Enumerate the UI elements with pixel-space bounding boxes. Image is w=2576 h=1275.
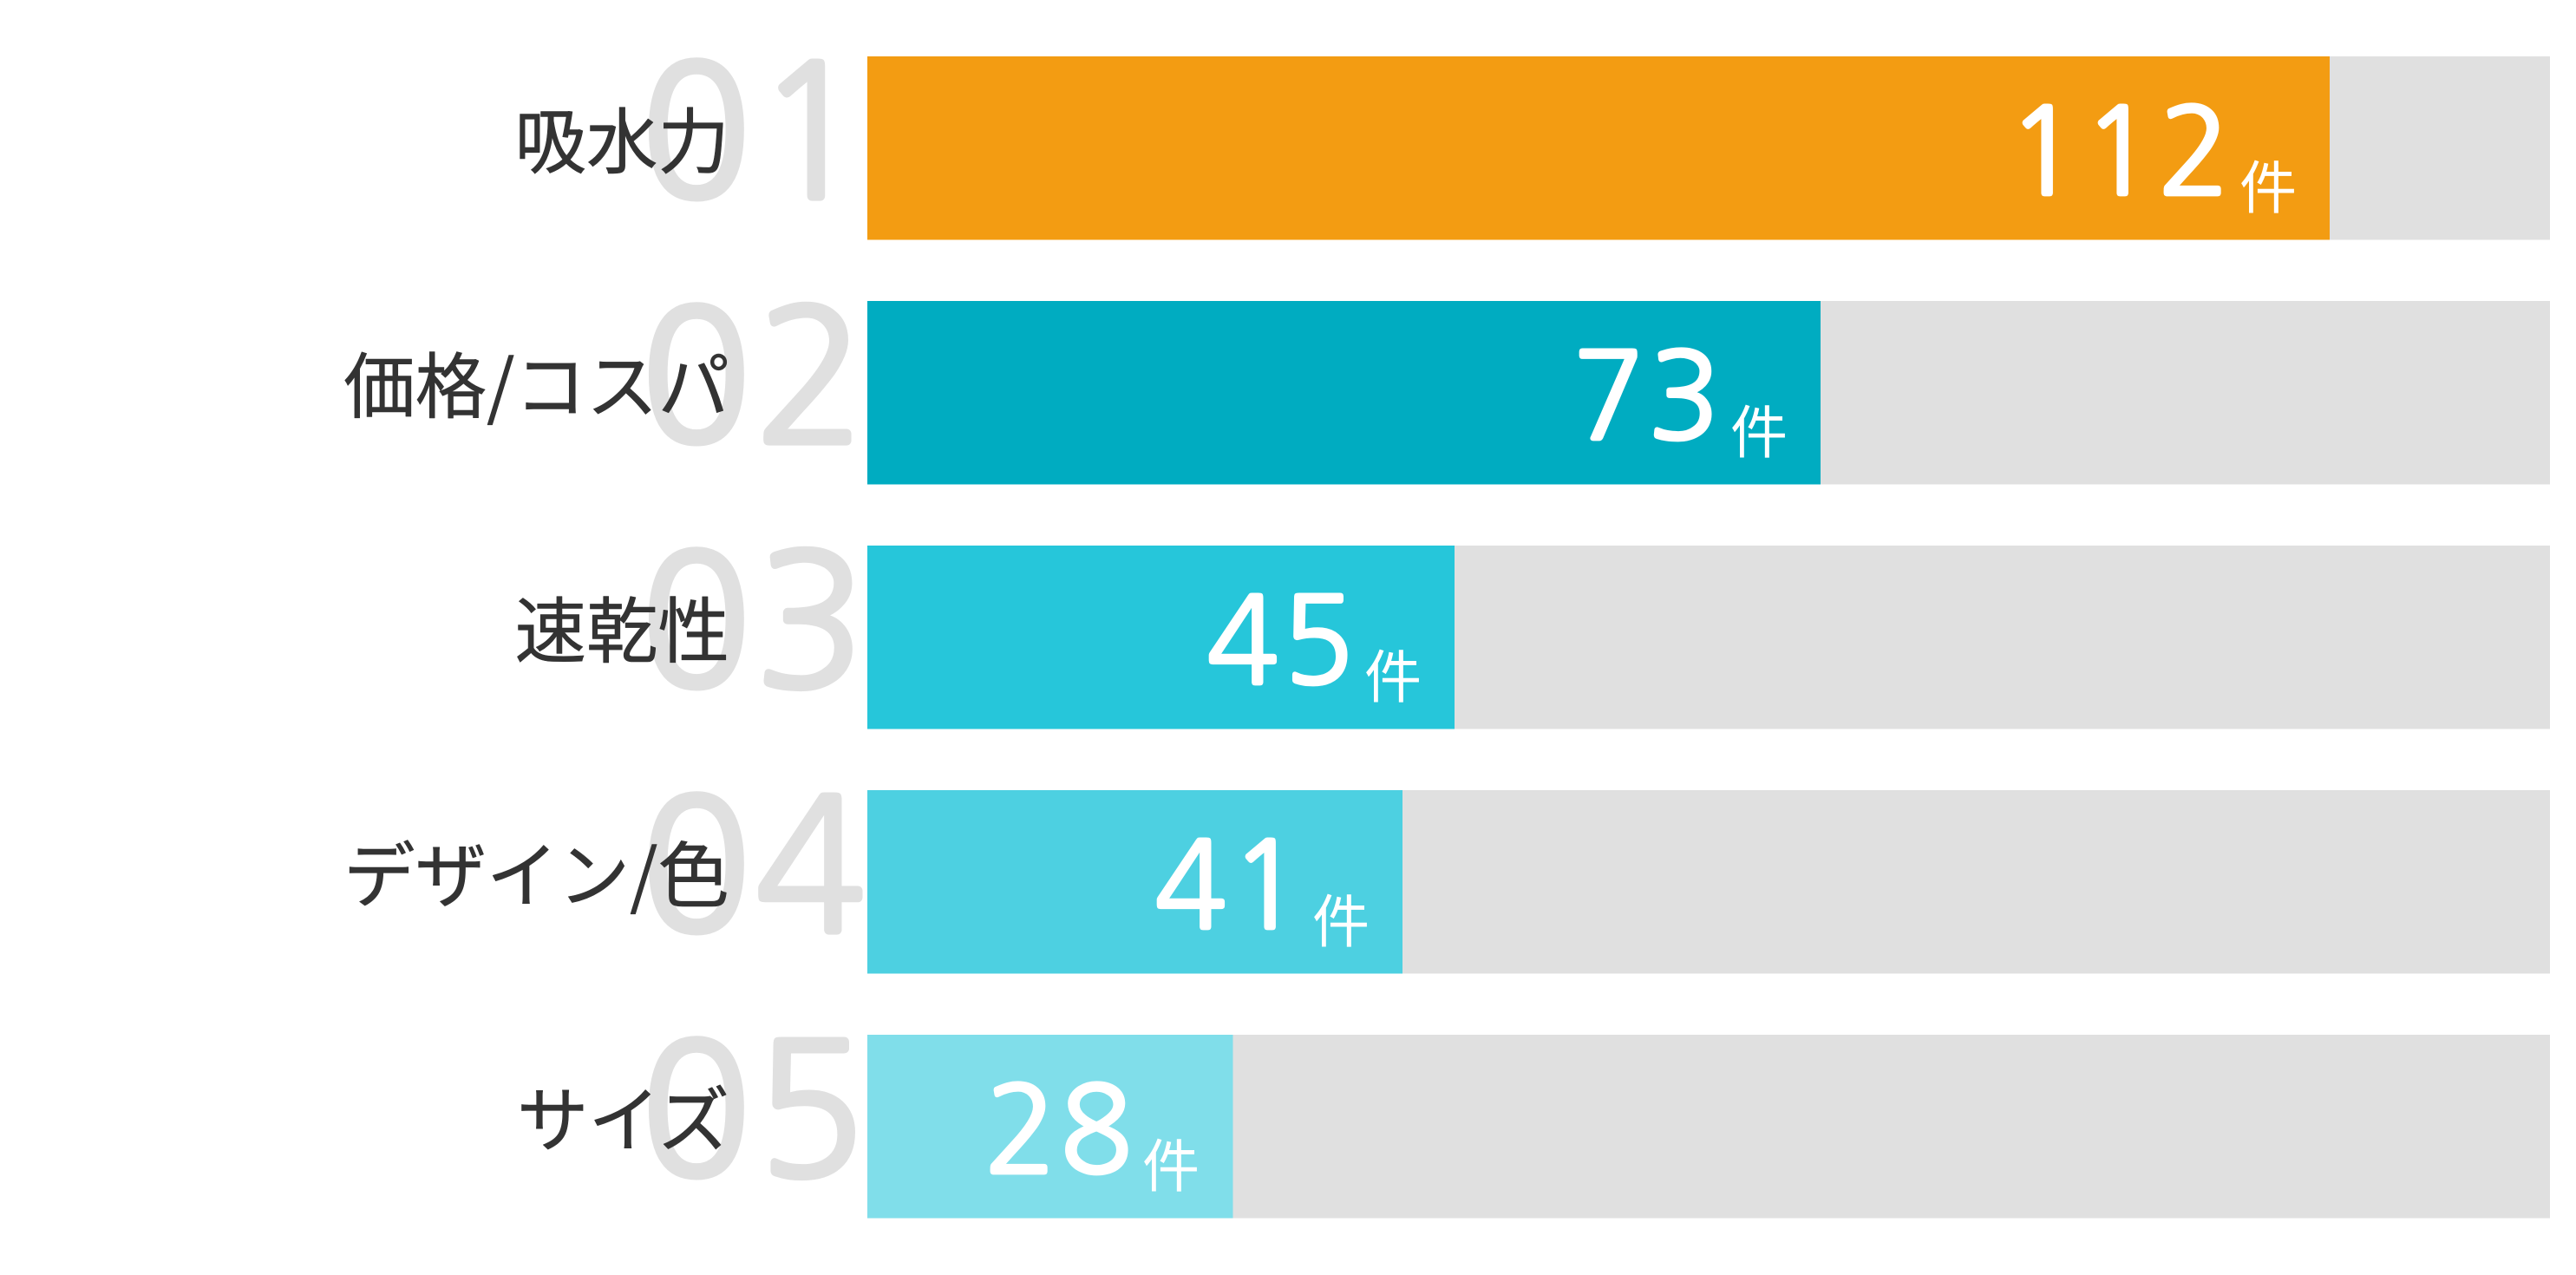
row 02: 価格/コスパ: 価格/コスパ (343, 329, 729, 433)
row 01: 吸水力: 01 (640, 41, 866, 225)
row 04: デザイン/色 (343, 775, 2550, 973)
row 03: 速乾性: 45 (1206, 581, 1355, 701)
row 04: デザイン/色: デザイン/色 (343, 818, 729, 922)
row 02: 価格/コスパ: 件 (1730, 387, 1788, 470)
row 03: 速乾性 (515, 530, 2550, 729)
row 05: サイズ: サイズ (517, 1062, 729, 1167)
row 03: 速乾性: 速乾性 (515, 573, 729, 677)
row 05: サイズ: 05 (640, 1019, 866, 1203)
row 02: 価格/コスパ: 73 (1572, 337, 1721, 456)
row 05: サイズ: 28 (984, 1070, 1133, 1190)
row 04: デザイン/色: 04 (640, 775, 866, 958)
row 04: デザイン/色: 41 (1154, 826, 1303, 945)
row 05: サイズ: 件 (1142, 1121, 1200, 1204)
row 01: 吸水力: 吸水力 (515, 84, 729, 188)
row 03: 速乾性: 03 (640, 530, 866, 714)
row 01: 吸水力: 件 (2239, 142, 2297, 226)
row 01: 吸水力: 112 (2007, 92, 2231, 212)
row 02: 価格/コスパ: 02 (640, 285, 866, 469)
row 02: 価格/コスパ (343, 285, 2550, 484)
row 01: 吸水力 (515, 41, 2550, 239)
row 04: デザイン/色: 件 (1312, 876, 1370, 959)
row 05: サイズ (517, 1019, 2550, 1218)
row 03: 速乾性: 件 (1364, 631, 1422, 715)
